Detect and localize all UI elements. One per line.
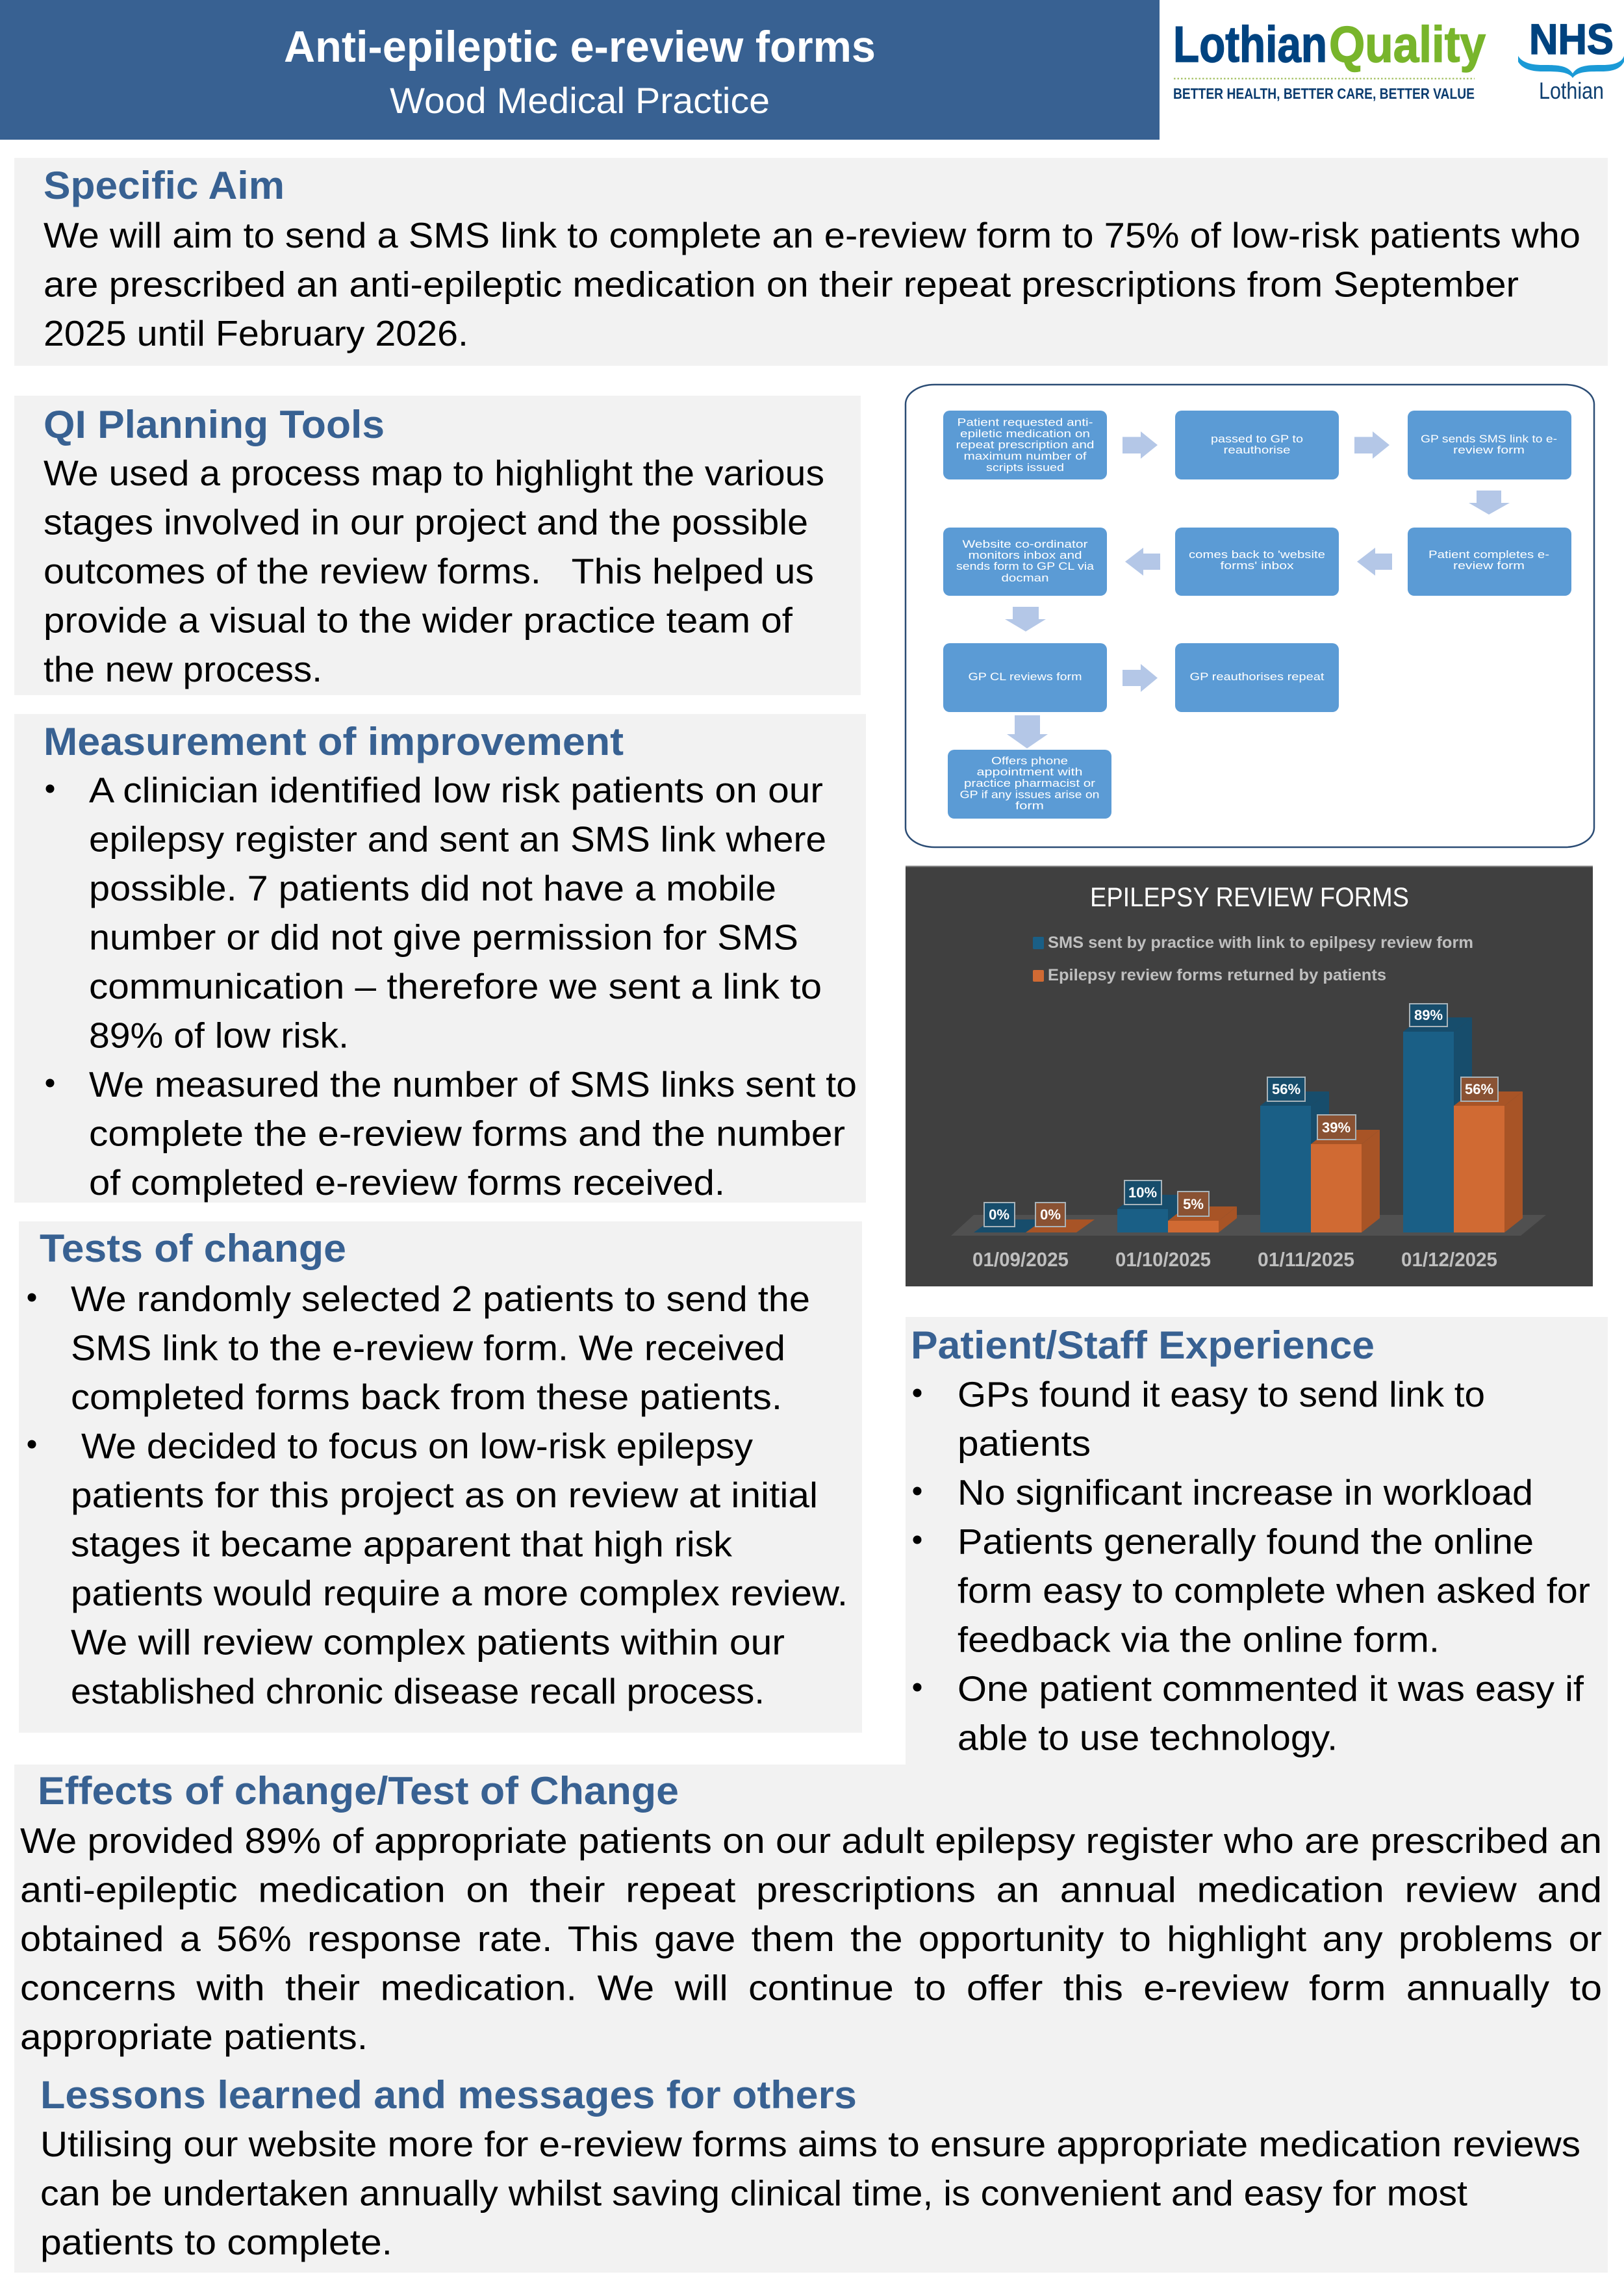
process step labels: docman [1002, 572, 1048, 584]
subtitle: Wood Medical Practice [390, 80, 770, 121]
data labels: 56% [1272, 1081, 1300, 1097]
text: lessons learned: patients to complete. [40, 2222, 392, 2262]
list: tests of change bullets: stages it became apparent that high risk [71, 1524, 733, 1564]
list: tests of change bullets: We decided to focus on low-risk epilepsy [81, 1425, 754, 1466]
logo: Lothian Quality: BETTER HEALTH, BETTER CARE, BETTER VALUE [1173, 85, 1475, 102]
list: experience bullets: No significant increase in workload [958, 1472, 1533, 1512]
panel: tests of change [19, 1221, 862, 1733]
text: QI planning description [44, 453, 824, 689]
text: QI planning description: stages involved in our project and the possible [44, 502, 808, 542]
list: measurement bullets: communication – therefore we sent a link to [89, 966, 822, 1006]
text: effects of change: obtained a 56% response rate. This gave them the opportunity to highlight any problems or [20, 1919, 1602, 1959]
bars: 01/12/2025 [1403, 1017, 1523, 1232]
process step labels [956, 416, 1557, 812]
heading: lessons learned: Lessons learned and messages for others [40, 2073, 857, 2117]
text: effects of change: appropriate patients. [20, 2017, 368, 2057]
logo: Lothian Quality: Lothian [1173, 16, 1327, 73]
list: tests of change bullets [27, 1279, 848, 1711]
panel: QI planning tools [14, 396, 861, 695]
process step labels: GP reauthorises repeat [1190, 670, 1325, 683]
chart floor [951, 1215, 1546, 1236]
logo: Lothian Quality: Quality [1329, 16, 1486, 73]
text: effects of change: We provided 89% of appropriate patients on our adult epilepsy register who are prescribed an [20, 1820, 1602, 1861]
data labels: 39% [1322, 1119, 1351, 1136]
panel: specific aim [14, 158, 1608, 366]
process arrows [1005, 431, 1510, 748]
text: aim statement: are prescribed an anti-epileptic medication on their repeat prescriptions from September [44, 264, 1519, 304]
data labels: 0% [1040, 1206, 1061, 1223]
data labels: 10% [1128, 1184, 1157, 1201]
chart title: EPILEPSY REVIEW FORMS [1090, 882, 1409, 912]
text: aim statement: 2025 until February 2026. [44, 313, 468, 353]
process step labels: maximum number of [964, 450, 1087, 463]
data labels [984, 1004, 1498, 1227]
title: Anti-epileptic e-review forms [284, 22, 876, 71]
data labels: 0% [989, 1206, 1009, 1223]
data labels: 56% [1465, 1081, 1493, 1097]
heading: specific aim: Specific Aim [44, 164, 285, 207]
bars: 01/10/2025 [1117, 1195, 1237, 1232]
list: tests of change bullets: completed forms back from these patients. [71, 1377, 782, 1417]
process step labels: epiletic medication on [960, 427, 1090, 440]
text: effects of change: concerns with their medication. We will continue to offer this e-review form annually to [20, 1967, 1602, 2008]
list: tests of change bullets: We will review complex patients within our [71, 1622, 785, 1662]
process step labels: form [1015, 799, 1044, 812]
list: measurement bullets: complete the e-review forms and the number [89, 1114, 845, 1154]
process step labels: sends form to GP CL via [956, 560, 1095, 572]
list: measurement bullets: of completed e-review forms received. [89, 1162, 725, 1203]
list: tests of change bullets: We randomly selected 2 patients to send the [71, 1279, 810, 1319]
text: lessons learned [40, 2124, 1580, 2262]
category axis labels: 01/12/2025 [1401, 1248, 1497, 1271]
text: effects of change [20, 1820, 1602, 2057]
bars: 01/11/2025 [1260, 1091, 1380, 1232]
category axis labels [972, 1248, 1497, 1271]
category axis labels: 01/09/2025 [972, 1248, 1069, 1271]
list: measurement bullets: number or did not give permission for SMS [89, 917, 798, 958]
process step labels: review form [1453, 444, 1525, 456]
process step labels: repeat prescription and [956, 439, 1094, 451]
heading: QI planning tools: QI Planning Tools [44, 403, 385, 446]
data labels: 5% [1183, 1196, 1204, 1212]
list: tests of change bullets: SMS link to the e-review form. We received [71, 1328, 785, 1368]
process step labels: GP sends SMS link to e- [1421, 433, 1557, 445]
chart: epilepsy review forms [906, 866, 1593, 1286]
process step labels: reauthorise [1224, 444, 1290, 456]
process step labels: scripts issued [986, 461, 1064, 474]
process step boxes [943, 411, 1571, 819]
heading: tests of change: Tests of change [40, 1227, 346, 1270]
list: experience bullets: form easy to complete when asked for [958, 1570, 1590, 1611]
list: experience bullets: patients [958, 1423, 1091, 1463]
bars: 01/09/2025 [974, 1219, 1095, 1232]
process step labels: GP if any issues arise on [960, 789, 1099, 800]
heading: effects of change: Effects of change/Test of Change [38, 1769, 679, 1813]
list: measurement bullets: epilepsy register and sent an SMS link where [89, 819, 826, 859]
list: experience bullets: Patients generally found the online [958, 1522, 1534, 1562]
process step labels: review form [1453, 559, 1525, 572]
text: aim statement: We will aim to send a SMS link to complete an e-review form to 75% of low-risk patients who [44, 215, 1580, 255]
list: measurement bullets: We measured the number of SMS links sent to [89, 1064, 857, 1104]
process step labels: appointment with [977, 765, 1082, 778]
text: QI planning description: the new process. [44, 649, 322, 689]
process step labels: forms' inbox [1220, 559, 1294, 572]
list: measurement bullets: 89% of low risk. [89, 1015, 349, 1055]
process step labels: Patient requested anti- [958, 416, 1093, 429]
process step labels: GP CL reviews form [968, 670, 1082, 683]
list: measurement bullets: A clinician identified low risk patients on our [89, 770, 823, 810]
process step labels: passed to GP to [1211, 433, 1303, 445]
chart legend [1033, 934, 1473, 984]
logo: NHS Lothian: NHS [1529, 15, 1614, 63]
chart legend: SMS sent by practice with link to epilpesy review form [1048, 934, 1473, 952]
text: lessons learned: Utilising our website more for e-review forms aims to ensure appropriate medication reviews [40, 2124, 1580, 2164]
text: QI planning description: We used a process map to highlight the various [44, 453, 824, 493]
process step labels: Website co-ordinator [963, 538, 1088, 550]
text: effects of change: anti-epileptic medication on their repeat prescriptions an annual medication review and [20, 1870, 1602, 1910]
process step labels: monitors inbox and [968, 549, 1082, 561]
logo: Lothian Quality [1173, 16, 1486, 102]
text: aim statement [44, 215, 1580, 353]
text: QI planning description: provide a visual to the wider practice team of [44, 600, 793, 641]
process step labels: comes back to 'website [1189, 548, 1325, 561]
category axis labels: 01/11/2025 [1258, 1248, 1354, 1271]
list: tests of change bullets: patients for this project as on review at initial [71, 1475, 818, 1515]
logo: NHS Lothian [1518, 15, 1624, 104]
chart legend: Epilepsy review forms returned by patients [1048, 966, 1386, 984]
logo: NHS Lothian: Lothian [1539, 77, 1604, 104]
process step labels: Patient completes e- [1428, 548, 1549, 561]
panel: patient/staff experience [906, 1317, 1608, 1772]
panel: measurement of improvement [14, 714, 866, 1203]
list: experience bullets: GPs found it easy to send link to [958, 1374, 1485, 1414]
list: tests of change bullets: patients would require a more complex review. [71, 1573, 848, 1613]
text: lessons learned: can be undertaken annually whilst saving clinical time, is convenient and easy for most [40, 2173, 1467, 2213]
panel: effects and lessons [14, 1765, 1608, 2273]
heading: measurement of improvement: Measurement of improvement [44, 720, 624, 763]
process step labels: Offers phone [991, 755, 1068, 767]
process step labels: practice pharmacist or [964, 777, 1095, 789]
list: experience bullets [913, 1374, 1590, 1758]
list: experience bullets: able to use technology. [958, 1718, 1338, 1758]
heading: patient/staff experience: Patient/Staff Experience [911, 1323, 1375, 1367]
list: measurement bullets: possible. 7 patients did not have a mobile [89, 868, 776, 908]
data labels: 89% [1414, 1007, 1443, 1023]
panel: process map [906, 385, 1594, 847]
category axis labels: 01/10/2025 [1115, 1248, 1211, 1271]
header banner [0, 0, 1160, 140]
list: tests of change bullets: established chronic disease recall process. [71, 1671, 765, 1711]
text: QI planning description: outcomes of the review forms. This helped us [44, 551, 814, 591]
list: experience bullets: One patient commented it was easy if [958, 1668, 1584, 1709]
list: experience bullets: feedback via the online form. [958, 1619, 1440, 1659]
list: measurement bullets [45, 770, 857, 1203]
